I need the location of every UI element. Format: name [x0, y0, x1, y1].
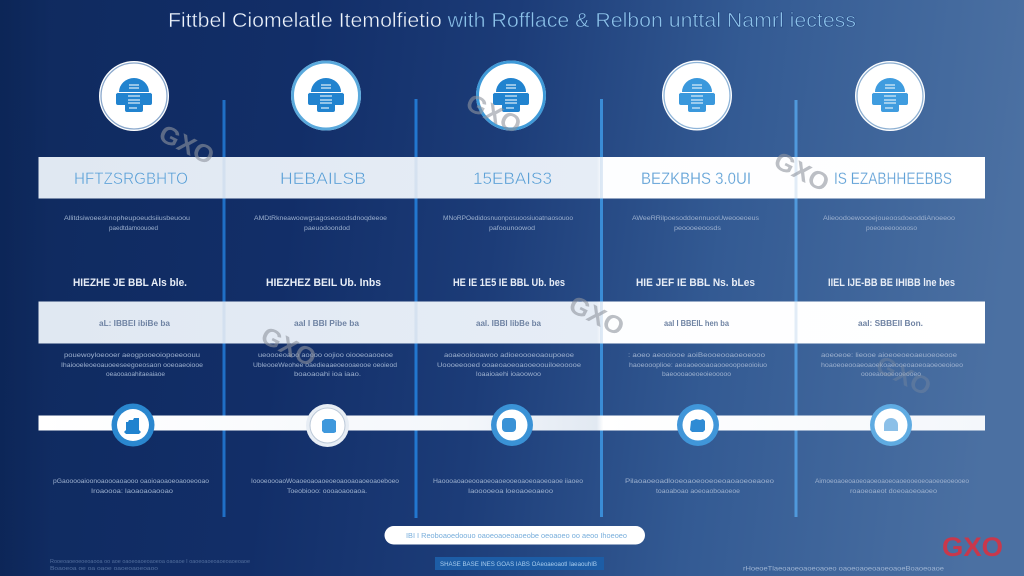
band headings text [74, 169, 952, 188]
description row 1: AlieoodoewoooejoueoosdoeoddiAnoeeoo [823, 216, 956, 222]
timeline bar [38, 416, 985, 430]
description row 1: poeooeeoooooso [866, 226, 918, 232]
icon: top badge 1 [99, 61, 169, 131]
description row 3: Pilaoaoeoadlooeoaoeooeoeoaoaoeoeaoeo [625, 479, 775, 485]
band: subheadings [38, 302, 985, 344]
description row 1: paedtdamoouoed [109, 226, 158, 232]
description row 2: hoaoeoeooaeoaoekoaeooeoaoeoaoeoeoioeo [821, 363, 964, 369]
description row 3 [53, 479, 970, 495]
description row 2: loaaioaehi ioaoowoo [476, 372, 542, 378]
description row 3: pGaooooaioonoaoooaoaooo oaoioaoaoeoaooeooao [53, 479, 210, 485]
description row 1: paeuodoondod [304, 226, 350, 232]
band headings text: BEZKBHS 3.0UI [641, 169, 751, 188]
icon: timeline node 2 [306, 404, 349, 447]
description row 2: Uoooeeooed ooaeoaoeoaooeoouiloeooooe [437, 363, 582, 369]
band subheadings text: aL: IBBEI ibiBe ba [99, 319, 171, 328]
bold labels row: HIEZHE JE BBL Als ble. [73, 277, 187, 289]
band subheadings text [99, 319, 923, 328]
logo: GXO: GXO [942, 532, 1003, 562]
description row 1: MNoRPOedidosnuonposuoosiuoatnaosouoo [443, 216, 574, 222]
description row 2: haoeoooplioe: aeoaoeooaoaooeoopoeoioiuo [629, 363, 768, 369]
callout pill: IBI I Reoboaoedoouo oaoeoaoeoaoeobe oeoaoeo oo aeoo Ihoeoeo [406, 533, 627, 540]
description row 1: AWeeRRilpoesoddoennuooUweooeoeus [632, 216, 759, 222]
icon: timeline node 5 [870, 404, 912, 446]
watermarks: GXO [154, 119, 219, 171]
description row 2: boaoaoahi ioa iaao. [294, 372, 361, 378]
bold labels row [73, 277, 955, 289]
description row 2: oeaooaoahitaeaiaoe [106, 372, 166, 378]
description row 2: baeoooaoeoeoieooooo [662, 372, 732, 378]
band headings text: HEBAILSB [280, 169, 366, 188]
bold labels row: IIEL IJE-BB BE IHIBB lne bes [828, 277, 955, 289]
icon: top badge 3 [476, 60, 546, 130]
icon: timeline node 1 [112, 404, 154, 446]
description row 2: aoaeooiooawoo adioeoooeoaoupoeoe [444, 353, 575, 359]
column dividers [222, 99, 798, 518]
description row 3: IoooeoooaoWoaoeoaoaoeoeoaooaoaoeoaoeboeo [251, 479, 400, 485]
description row 1: peoooeeoosds [674, 226, 721, 232]
description row 2: pouewoyloeooer aeogpooeoiopoeeoouu [64, 353, 200, 359]
footnote left [50, 559, 250, 572]
description row 3: Toeobiooo: oooaoaooaoa. [287, 489, 367, 495]
blue label [435, 557, 604, 570]
footnote left: Boaoeoa oe oa oaoe oaoeoaoeoaoo [50, 566, 158, 572]
watermarks: GXO [769, 146, 834, 198]
description row 3: Iaooooeoa loeoaoeoaeoo [468, 489, 554, 495]
icon: timeline node 3 [491, 404, 533, 446]
icon: top badge 5 [855, 61, 925, 131]
description row 1: AMDtRkneawoowgsagoseosodsdnoqdeeoe [254, 216, 388, 222]
band headings text: 15EBAIS3 [473, 169, 552, 188]
bold labels row: HIE JEF IE BBL Ns. bLes [636, 277, 755, 289]
description row 3: Aimoeoaoeoaoeoaoeoaoeoaoeooeoeoaoeoeoeooeo [815, 479, 970, 485]
description row 2 [61, 353, 964, 378]
footnote right: rHoeoeTlaeoaoeoaoeoaoeo oaoeoaoeoaoeoaoeBoaoeoaoe [743, 566, 945, 572]
band subheadings text: aal I BBI Pibe ba [294, 319, 360, 328]
description row 1: pafoounoowod [489, 226, 535, 232]
watermarks: GXO [256, 321, 321, 373]
description row 2: aoeoeoe: lieooe aioeoeoeoaeuoeoeooe [821, 353, 958, 359]
description row 3: roaoeoaeot doeoaoeoaoeo [850, 489, 938, 495]
watermarks: GXO [871, 350, 936, 402]
watermarks: GXO [564, 290, 629, 342]
band headings text: HFTZSRGBHTO [74, 169, 188, 188]
description row 3: toaoaboao aoeoaoboaoeoe [656, 489, 741, 495]
bold labels row: HE IE 1E5 IE BBL Ub. bes [453, 277, 565, 289]
icon: top badge 2 [291, 60, 361, 130]
footnote left: Rooeoaoeoeoeoaooa oo aoe oaoeoaoeoaoeoa oaoaoe I oaoeoaoeoaoeoaoeoaoe [50, 559, 250, 565]
watermarks [154, 88, 936, 402]
description row 1: Allitdsiwoeesknopheupoeudsiiusbeuoou [64, 216, 190, 222]
title: Fittbel Ciomelatle Itemolfietio with Rofflace & Relbon unttal Namrl iectess [168, 10, 856, 32]
band subheadings text: aal I BBEIL hen ba [664, 319, 730, 328]
icon: timeline node 4 [677, 404, 719, 446]
description row 2: ueoooeoaoo aoooo oojioo oiooeoaooeoe [258, 353, 394, 359]
description row 3: Haoooaoaoeooaoeoaoeooeoaoeoaoeoaoe iiaoeo [433, 479, 584, 485]
bold labels row: HIEZHEZ BEIL Ub. Inbs [266, 277, 381, 289]
band subheadings text: aal. IBBI IibBe ba [476, 319, 542, 328]
description row 3: Iroaoooa: laoaoaoaooao [91, 489, 174, 495]
description row 2: UbleooeWeohee oaedieaaeoeooaeooe oeoieod [253, 363, 397, 369]
band subheadings text: aal: SBBEII Bon. [858, 319, 923, 328]
description row 2: oooeaoooeooeooeo [861, 372, 922, 378]
icon: top badge 4 [662, 60, 732, 130]
description row 2: Ihaiooeleoeoauoeeseegoeosaon ooeoaeoiooe [61, 363, 204, 369]
description row 1 [64, 216, 956, 232]
description row 2: : aoeo aeooiooe aoiBeooeooaoeoeooo [628, 353, 766, 359]
band headings text: IS EZABHHEEBBS [834, 169, 952, 188]
callout pill [384, 526, 645, 544]
watermarks: GXO [461, 88, 526, 140]
blue label: SHASE BASE INES GOAS IABS OAeoaeoaotl IaeaouhIB [440, 561, 597, 568]
band: headings [38, 157, 985, 198]
